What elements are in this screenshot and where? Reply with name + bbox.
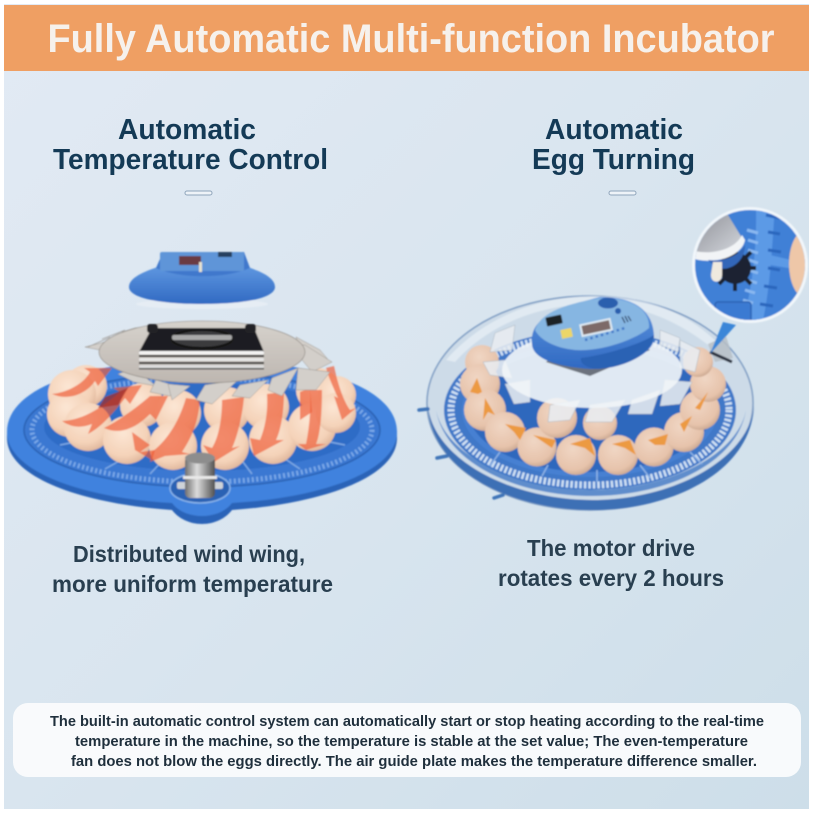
heading: automatic temperature control: [53, 114, 328, 176]
title banner: Fully Automatic Multi-function Incubator: [48, 17, 774, 61]
turning eggs: [460, 345, 726, 475]
illustration: temperature control exploded view: [7, 252, 397, 524]
divider pills: [185, 191, 636, 195]
description text box: temperature in the machine, so the temperature is stable at the set value; The even-temperature: [75, 734, 748, 750]
heading: automatic temperature control: Temperature Control: [53, 144, 328, 176]
caption: temperature control: more uniform temperature: [52, 571, 333, 597]
fan module: [139, 324, 264, 370]
eggs with airflow arrows: [47, 365, 356, 470]
caption: egg turning: The motor drive: [527, 535, 695, 561]
sensor post: [170, 452, 230, 503]
title banner: [4, 5, 809, 71]
heading: automatic egg turning: Egg Turning: [532, 144, 695, 176]
egg tray base: [7, 360, 397, 524]
heading: automatic temperature control: Automatic: [118, 114, 256, 146]
control unit: [532, 297, 654, 376]
translucent wind wing disc: [483, 325, 700, 422]
tray and clear dome: [419, 296, 754, 510]
description text box: The built-in automatic control system can automatically start or stop heating according to the real-time: [50, 714, 764, 730]
caption: egg turning: rotates every 2 hours: [498, 565, 724, 591]
illustration: egg turning incubator: [419, 296, 754, 510]
caption: egg turning: [498, 535, 724, 591]
air guide disc with wind wings: [85, 321, 332, 404]
description text box: [13, 703, 801, 777]
caption: temperature control: [52, 541, 333, 597]
heading: automatic egg turning: Automatic: [545, 114, 683, 146]
motor near rim: [708, 322, 736, 362]
description text box: fan does not blow the eggs directly. The air guide plate makes the temperature difference smaller.: [71, 754, 757, 770]
inset: motor gear close-up: [692, 206, 808, 324]
caption: temperature control: Distributed wind wing,: [73, 541, 305, 567]
heading: automatic egg turning: [532, 114, 695, 176]
control unit lid: [129, 252, 275, 309]
